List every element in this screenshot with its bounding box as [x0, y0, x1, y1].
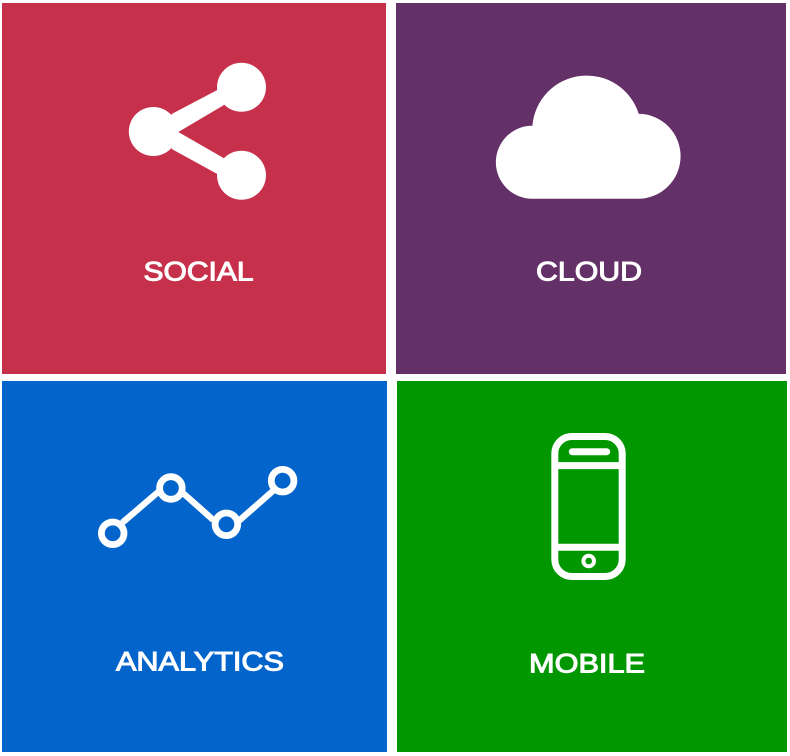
icon: share [129, 63, 266, 200]
icon: smartphone [555, 436, 622, 576]
icon: line chart [101, 469, 294, 545]
panel: mobile [397, 381, 787, 752]
panel: cloud [396, 3, 786, 374]
heading: social: SOCIAL [144, 256, 254, 286]
heading: analytics: ANALYTICS [116, 646, 284, 676]
icon: cloud [496, 76, 681, 199]
heading: mobile: MOBILE [529, 648, 645, 678]
panel: analytics [2, 381, 387, 752]
heading: cloud: CLOUD [536, 256, 642, 286]
panel: social [2, 3, 386, 374]
